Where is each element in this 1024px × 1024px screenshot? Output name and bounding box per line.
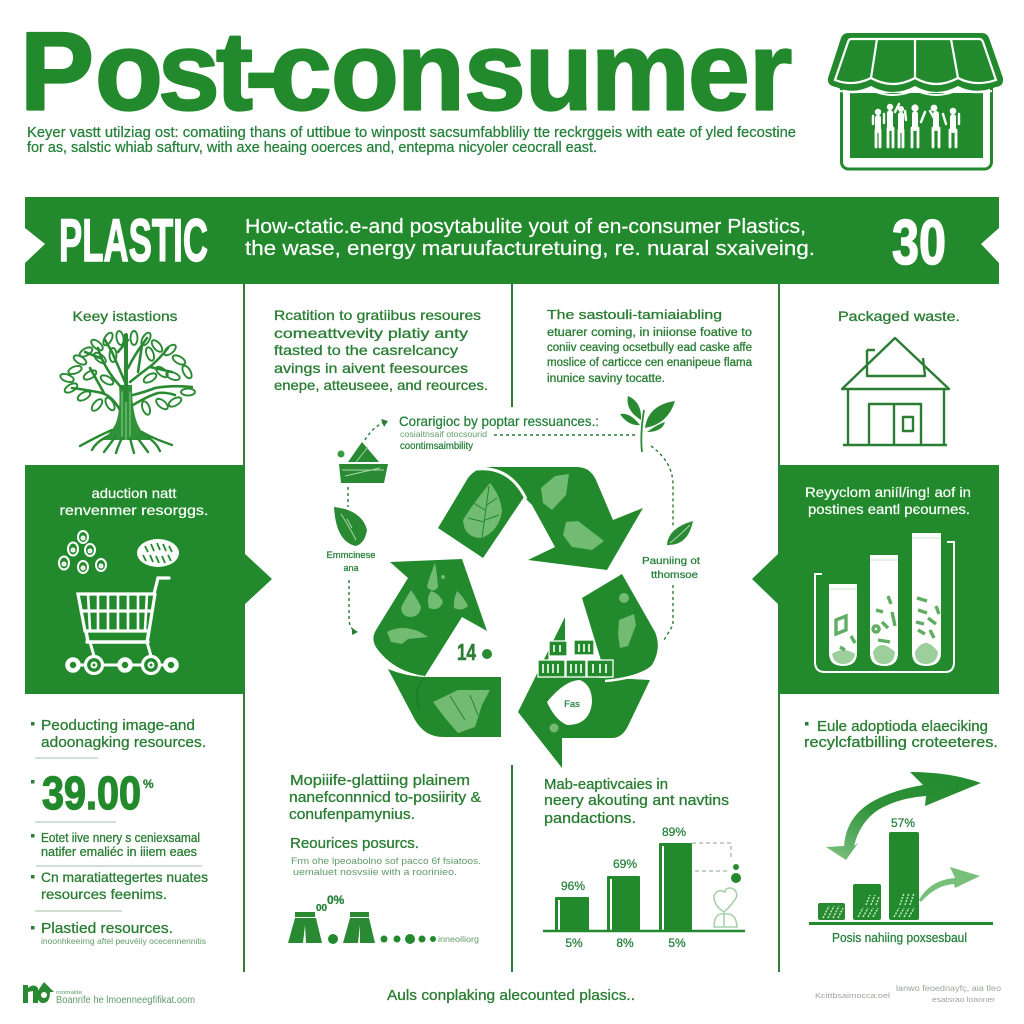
panel: bottom right growth chart <box>804 719 998 945</box>
bar chart: 5% <box>565 936 583 950</box>
recycling arrow: left <box>373 559 487 676</box>
bullet text <box>804 719 998 751</box>
bullet text: recylcfatbilling croteeteres. <box>804 735 998 751</box>
icon: test tube chart <box>815 533 954 672</box>
panel: left stats column <box>31 717 208 946</box>
recycling arrow: bottom left <box>388 669 501 737</box>
stat text: energy <box>41 830 200 859</box>
label: left: Emmcinese <box>326 550 376 560</box>
label: fas: Fas <box>564 699 580 710</box>
text block: sustainability top: inunice saviny tocatte. <box>547 373 665 385</box>
heading: packaged waste: Packaged waste. <box>838 308 960 324</box>
text block: neery akouting ant navtins <box>544 793 729 809</box>
footer right note: Kcittbsaimocca:oel <box>815 991 890 1000</box>
text block: resources top middle: enepe, atteuseee, and reources. <box>274 377 488 393</box>
footer logo <box>23 982 195 1006</box>
left panel text: aduction natt <box>92 485 177 501</box>
label: left: ana <box>343 563 359 573</box>
arrow: small light <box>919 867 980 902</box>
right panel text: postines eantl pєournes. <box>808 501 970 517</box>
small text <box>291 856 481 878</box>
text block: conufenpamynius. <box>289 807 415 823</box>
percent label: 00 <box>316 903 328 914</box>
text block: resources top middle: comeattvevity platiy anty <box>274 325 468 341</box>
intro text block <box>27 124 796 156</box>
panel: left green reduction panel <box>25 465 272 694</box>
icon: buildings <box>538 640 613 677</box>
column dividers <box>244 284 779 972</box>
stat text: producing: Peoducting image-and <box>41 717 195 734</box>
icon: storefront with people <box>828 33 1003 169</box>
stat text: strategies: resources feenims. <box>41 886 167 902</box>
text block <box>289 773 481 852</box>
icon: person outline <box>714 864 741 927</box>
banner text: How-ctatic.e-and posytabulite yout of en-consumer Plastics, <box>245 216 806 238</box>
panel: packaged waste <box>838 308 960 445</box>
title: Post-consumer <box>20 10 792 134</box>
left panel text <box>60 485 208 518</box>
text block: Mab-eaptivcaies in <box>544 777 668 793</box>
arrowheads <box>352 419 388 635</box>
bar chart: 89% <box>662 825 686 839</box>
footer right note: esatsrao loanner <box>932 995 996 1004</box>
icon: tree <box>59 330 195 453</box>
footer logo: roomaiite <box>56 990 82 996</box>
panel: bottom center-left <box>288 773 481 944</box>
text block: nanefconnnicd to-posiirity & <box>289 790 481 806</box>
banner number: 30 <box>892 208 946 278</box>
icon: leaf right <box>667 521 693 545</box>
text block: Mopiiife-glattiing plainem <box>290 773 470 789</box>
right panel text <box>805 484 971 517</box>
arrow: big curved <box>826 772 981 860</box>
flow: dashed cycle lines <box>348 422 673 640</box>
icon: shopping cart <box>68 578 176 674</box>
chart caption: Posis nahiing poxsesbaul <box>832 931 967 945</box>
text block: resources top middle <box>274 307 488 393</box>
bar chart: 8% <box>616 936 634 950</box>
bars <box>809 816 993 924</box>
intro text block: Keyer vastt utilziag ost: comatiing thans of uttibue to winpostt sacsumfabbliliy tte reckrggeis with eate of yled fecostine <box>27 124 796 141</box>
intro text block: for as, salstic whiab safturv, with axe heaing ooerces and, entepma nicyoler ceocrall east. <box>27 139 597 156</box>
text block: sustainability top: The sastouli-tamiaiabling <box>547 308 722 322</box>
stat text: energy: natifer emaliéc in iiiem eaes <box>41 844 197 859</box>
text block: sustainability top: coniiv ceaving ocsetbully ead caske affe <box>547 342 752 354</box>
icon: house <box>842 338 949 445</box>
big stat: 39.00 <box>42 767 141 819</box>
bar chart: 96% <box>561 879 585 893</box>
icon: leaf left <box>334 507 367 546</box>
left panel text: renvenmer resorggs. <box>60 502 208 518</box>
caption: popular resources: cosiaitnsaif otocsourid <box>400 429 487 439</box>
text block <box>544 777 729 827</box>
footer right note <box>815 984 1002 1004</box>
icon: textured oval <box>137 539 179 567</box>
stat text: strategies: Cn maratiattegertes nuates <box>41 869 208 885</box>
heading: key stations: Keey istastions <box>72 308 178 324</box>
stat text: strategies <box>41 869 208 902</box>
text block: Reourices posurcs. <box>290 836 419 852</box>
stat text: plastied: inoonhkeeirng aftel peuvéiiy ocecennennitis <box>41 936 206 946</box>
footer logo: Boanrife he lmoenneegfifikat.oom <box>56 995 195 1006</box>
caption: popular resources: Corarigioc by poptar ressuances.: <box>399 413 599 429</box>
label: left <box>326 550 376 573</box>
caption: popular resources: coontimsaimbility <box>400 441 473 452</box>
recycling arrow: bottom right <box>518 574 658 768</box>
text block: resources top middle: avings in aivent feesources <box>274 360 468 376</box>
center number: 14 <box>457 639 476 665</box>
small text: Frm ohe lpeoabolno sof pacco 6f fsiatoos. <box>291 856 481 867</box>
dot scale: inneoiliorg <box>438 935 479 944</box>
panel: bottom center-right bar chart <box>543 777 745 950</box>
percent label <box>316 893 345 914</box>
text block: pandactions. <box>544 811 636 827</box>
text block: sustainability top: etuarer coming, in iniionse foative to <box>547 327 752 339</box>
stat text: energy: Eotet iive nnery s ceniexsamal <box>41 830 200 845</box>
banner <box>25 197 999 284</box>
text block: sustainability top <box>547 308 753 385</box>
footer right note: lanwo feoednayfç, aia tleo <box>896 984 1002 993</box>
stat text: producing <box>41 717 206 751</box>
banner text: the wase, energy maruufacturetuing, re. nuaral sxaiveing. <box>245 238 815 260</box>
panel: right green recycling panel <box>752 465 999 694</box>
icon: shorts pair <box>288 912 375 943</box>
big stat: % <box>143 777 154 791</box>
text block: sustainability top: moslice of carticce cen enanipeue flama <box>547 357 753 369</box>
icon: green bag <box>338 442 388 483</box>
label: right <box>642 556 700 581</box>
bar chart: 69% <box>613 857 637 871</box>
stat text: producing: adoonagking resources. <box>41 734 206 751</box>
small text: uemaluet nosvsiie with a roorinieo. <box>293 867 457 878</box>
banner heading: PLASTIC <box>59 207 208 274</box>
recycling arrow: top <box>438 467 643 570</box>
text block: resources top middle: Rcatition to gratiibus resoures <box>274 307 481 323</box>
bullets <box>31 722 34 930</box>
footer center text: Auls conplaking alecounted plasics.. <box>387 987 635 1004</box>
text block: resources top middle: ftasted to the casrelcancy <box>274 342 458 358</box>
center recycling diagram <box>326 396 700 768</box>
bar chart <box>543 825 745 950</box>
panel: key stations <box>59 308 195 453</box>
stat text: plastied: Plastied resources. <box>41 920 173 937</box>
bars: 57% <box>891 816 915 830</box>
icon: plant sprig <box>620 396 675 452</box>
label: right: tthomsoe <box>651 570 698 581</box>
stat text: plastied <box>41 920 206 946</box>
label: right: Pauniing ot <box>642 556 700 567</box>
dot scale <box>328 934 479 944</box>
banner text <box>245 216 815 260</box>
caption: popular resources <box>399 413 599 452</box>
bullet text: Eule adoptioda elaeciking <box>817 719 988 735</box>
percent label: 0% <box>327 893 345 907</box>
right panel text: Reyyclom aniíl/ing! aof in <box>805 484 971 500</box>
bar chart: 5% <box>668 936 686 950</box>
icon: seeds <box>59 531 106 573</box>
